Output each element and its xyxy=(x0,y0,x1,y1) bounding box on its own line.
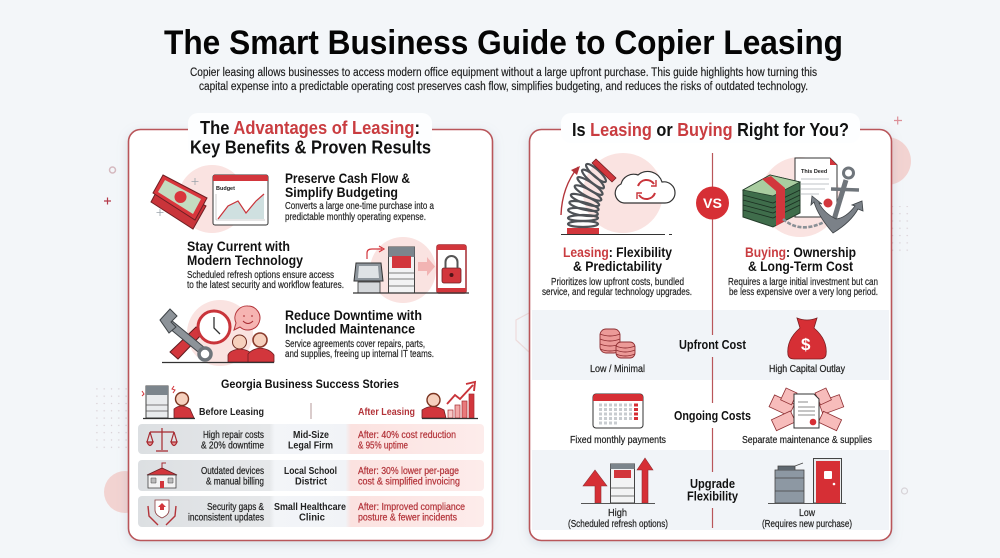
benefit: preserve cash flow: Converts a large one-time purchase into a xyxy=(285,201,434,212)
panel heading: advantages xyxy=(190,117,431,158)
benefit: preserve cash flow: Preserve Cash Flow & xyxy=(285,171,410,186)
benefit: preserve cash flow: Simplify Budgeting xyxy=(285,185,398,200)
story row: legal firm: Legal Firm xyxy=(288,440,333,452)
row label: upgrade flexibility xyxy=(687,476,739,504)
story row: legal firm: After: 40% cost reduction xyxy=(358,430,456,441)
buying summary: Buying: Ownership xyxy=(745,245,856,260)
leasing summary: Leasing: Flexibility xyxy=(563,245,672,260)
fixed payments label: Fixed monthly payments xyxy=(570,435,666,446)
icon: copier with up arrows xyxy=(581,458,655,504)
center divider xyxy=(712,153,714,528)
icon: money bag xyxy=(788,318,826,359)
low flexibility label xyxy=(762,508,852,530)
icon: versus badge: VS xyxy=(703,195,722,211)
benefit: preserve cash flow xyxy=(285,171,434,223)
icon: coins xyxy=(600,329,635,358)
label: after leasing: After Leasing xyxy=(358,406,415,418)
buying summary: & Long-Term Cost xyxy=(748,259,853,274)
intro text: Copier leasing allows businesses to access modern office equipment without a large upfront purchase. This guide highlights how turning this xyxy=(190,67,817,79)
title: The Smart Business Guide to Copier Leasing xyxy=(164,24,843,62)
icon: versus badge xyxy=(696,186,729,220)
low flexibility label: (Requires new purchase) xyxy=(762,519,852,530)
story row: legal firm xyxy=(138,424,484,454)
story row: school district: cost & simplified invoicing xyxy=(358,476,460,488)
intro text xyxy=(190,67,817,93)
story row: healthcare clinic: Small Healthcare xyxy=(274,501,346,513)
benefit: stay current: to the latest security and workflow features. xyxy=(187,280,344,291)
icon: money and budget chart: Budget xyxy=(216,186,235,192)
benefit: reduce downtime: and supplies, freeing up internal IT teams. xyxy=(285,349,434,360)
story row: school district xyxy=(138,460,484,491)
icon: money and budget chart xyxy=(151,165,268,233)
icon: copier and locked door xyxy=(768,458,846,504)
icon: successful user with growth chart xyxy=(422,382,478,418)
icon: invoice and scattered bills xyxy=(769,388,844,431)
story row: school district: Outdated devices xyxy=(201,466,264,477)
benefit: reduce downtime: Included Maintenance xyxy=(285,322,415,336)
buying summary: be less expensive over a very long period. xyxy=(729,287,878,298)
intro text: capital expense into a predictable operating cost preserves cash flow, simplifies budgeting, and reduces the risks of outdated technology. xyxy=(199,81,808,93)
comparison bands xyxy=(532,310,889,530)
story row: legal firm: & 20% downtime xyxy=(201,440,264,452)
buying summary: Requires a large initial investment but can xyxy=(728,277,878,288)
low flexibility label: Low xyxy=(799,508,816,519)
story row: school district: Local School xyxy=(284,465,337,477)
label: before leasing: Before Leasing xyxy=(199,406,264,418)
high outlay label: High Capital Outlay xyxy=(769,364,845,375)
icon: calendar xyxy=(593,394,643,428)
icon: frustrated user with copier xyxy=(142,386,195,418)
story row: school district: & manual billing xyxy=(206,476,264,488)
high flexibility label: High xyxy=(608,508,627,519)
story row: healthcare clinic: inconsistent updates xyxy=(188,512,264,524)
benefit: stay current: Stay Current with xyxy=(187,239,290,254)
story row: healthcare clinic: Clinic xyxy=(299,512,325,524)
panel: leasing or buying xyxy=(530,113,892,540)
row label: upfront cost: Upfront Cost xyxy=(679,337,747,352)
icon: spring and cloud xyxy=(561,153,675,234)
benefit: stay current: Modern Technology xyxy=(187,253,303,268)
icon: scales xyxy=(147,428,177,451)
story row: healthcare clinic: Security gaps & xyxy=(207,502,264,513)
benefit: stay current xyxy=(187,239,344,291)
benefit: reduce downtime: Service agreements cover repairs, parts, xyxy=(285,339,425,350)
panel heading: advantages: The Advantages of Leasing: xyxy=(200,117,420,138)
story row: school district: After: 30% lower per-page xyxy=(358,466,459,477)
icon: cash stack deed and anchor: This Deed xyxy=(801,169,827,175)
separate costs label: Separate maintenance & supplies xyxy=(742,435,872,446)
icon: cash stack deed and anchor xyxy=(743,157,863,237)
story row: healthcare clinic: After: Improved compliance xyxy=(358,502,465,513)
panel: advantages of leasing xyxy=(128,113,492,540)
panel heading: advantages: Key Benefits & Proven Results xyxy=(190,136,431,158)
row label: ongoing costs: Ongoing Costs xyxy=(674,408,751,423)
icon: school xyxy=(147,463,177,488)
leasing summary: Prioritizes low upfront costs, bundled xyxy=(551,277,684,288)
story row: healthcare clinic: posture & fewer incidents xyxy=(358,512,457,524)
leasing summary: service, and regular technology upgrades. xyxy=(542,287,692,298)
icon: device upgrade to secure phone xyxy=(353,237,469,303)
high flexibility label: (Scheduled refresh options) xyxy=(568,519,668,530)
row label: upgrade flexibility: Flexibility xyxy=(687,488,739,504)
story row: healthcare clinic xyxy=(138,496,484,527)
row label: upgrade flexibility: Upgrade xyxy=(690,476,735,491)
story row: school district: District xyxy=(295,476,327,488)
icon: wrench clock and team xyxy=(160,300,274,366)
story row: legal firm: High repair costs xyxy=(203,430,264,441)
icon: money bag: $ xyxy=(801,335,811,354)
benefit: reduce downtime: Reduce Downtime with xyxy=(285,308,422,323)
benefit: stay current: Scheduled refresh options ensure access xyxy=(187,270,334,281)
benefit: preserve cash flow: predictable monthly operating expense. xyxy=(285,212,426,223)
icon: shield in hands xyxy=(148,500,176,525)
leasing summary: & Predictability xyxy=(573,259,662,274)
story row: legal firm: & 95% uptime xyxy=(358,440,408,452)
buying summary xyxy=(728,245,878,298)
leasing summary xyxy=(542,245,692,298)
benefit: reduce downtime xyxy=(285,308,434,360)
panel heading: leasing or buying: Is Leasing or Buying Right for You? xyxy=(572,119,849,140)
low cost label: Low / Minimal xyxy=(590,364,645,375)
heading: success stories: Georgia Business Success Stories xyxy=(221,377,399,391)
story row: legal firm: Mid-Size xyxy=(293,429,329,441)
high flexibility label xyxy=(568,508,668,530)
